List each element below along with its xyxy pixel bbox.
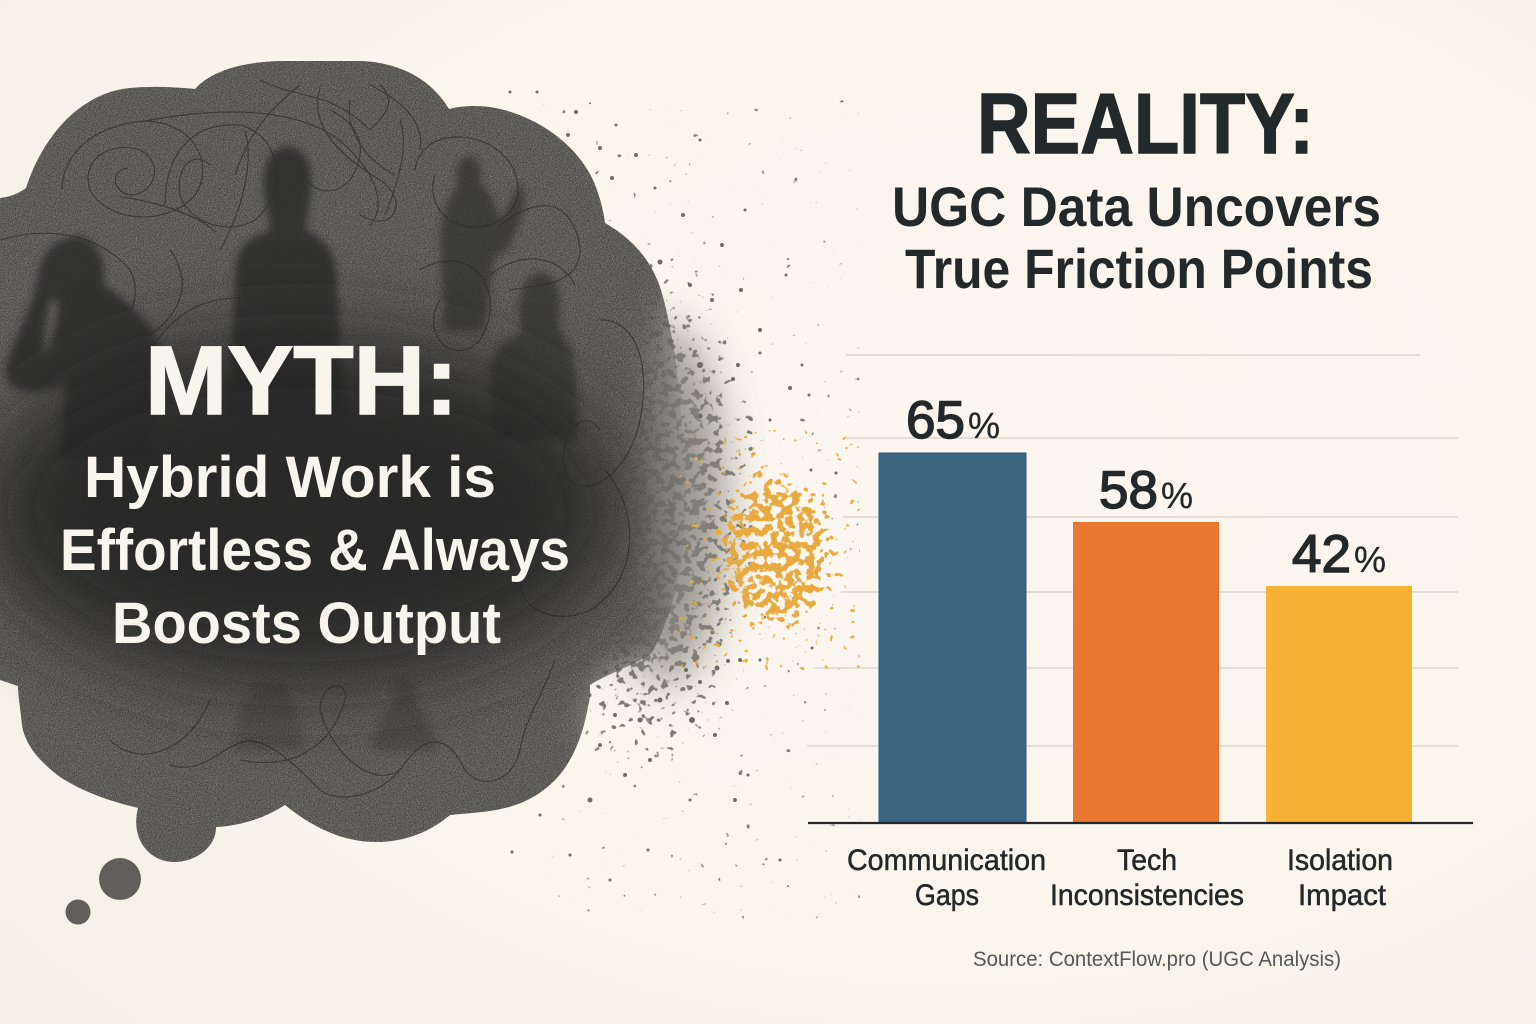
orange speckle spray [680,430,860,670]
scattered dots [508,90,838,882]
scribble lines [0,80,644,797]
label: communication gaps: Communication [847,844,1046,877]
thought bubble: medium [99,858,141,900]
label: tech inconsistencies: Inconsistencies [1050,879,1244,912]
panel: myth thought cloud [0,61,725,924]
dark centre of cloud [0,335,620,685]
silhouettes of people [6,147,578,750]
myth line 2: Effortless & Always [60,518,570,583]
thought bubble: small [66,900,90,924]
value: 58%: 58% [1099,461,1193,520]
label: isolation impact: Isolation [1287,844,1393,877]
bar chart [807,355,1473,912]
label: communication gaps: Gaps [915,879,979,912]
silhouette: faint figure low left [235,680,305,750]
silhouette: left person with raised arm [6,237,160,460]
heading: reality: REALITY: [977,77,1314,172]
silhouette: upper right person waving [440,157,524,330]
gray speckle spray [540,100,860,920]
cloud body [0,61,686,862]
axis line [808,822,1473,824]
silhouette: centre person [228,147,345,420]
silhouette: small figure low in cloud [372,680,436,750]
subtitle line 1: UGC Data Uncovers [892,175,1381,238]
silhouette: lower right person [490,273,578,440]
label: isolation impact: Impact [1298,879,1387,912]
myth statement [60,445,570,656]
source note: Source: ContextFlow.pro (UGC Analysis) [973,948,1341,971]
bar: isolation impact [1266,586,1412,823]
subtitle line 2: True Friction Points [905,237,1373,300]
bar: communication gaps [879,453,1026,823]
myth line 1: Hybrid Work is [84,445,496,510]
soft haze of cloud edge [605,325,725,685]
label: tech inconsistencies: Tech [1117,844,1177,877]
reality subtitle [892,175,1381,300]
value: 42%: 42% [1292,525,1386,584]
heading: myth: MYTH: [145,326,458,435]
bar: tech inconsistencies [1073,522,1219,823]
value: 65%: 65% [906,391,1000,450]
myth line 3: Boosts Output [112,591,501,656]
